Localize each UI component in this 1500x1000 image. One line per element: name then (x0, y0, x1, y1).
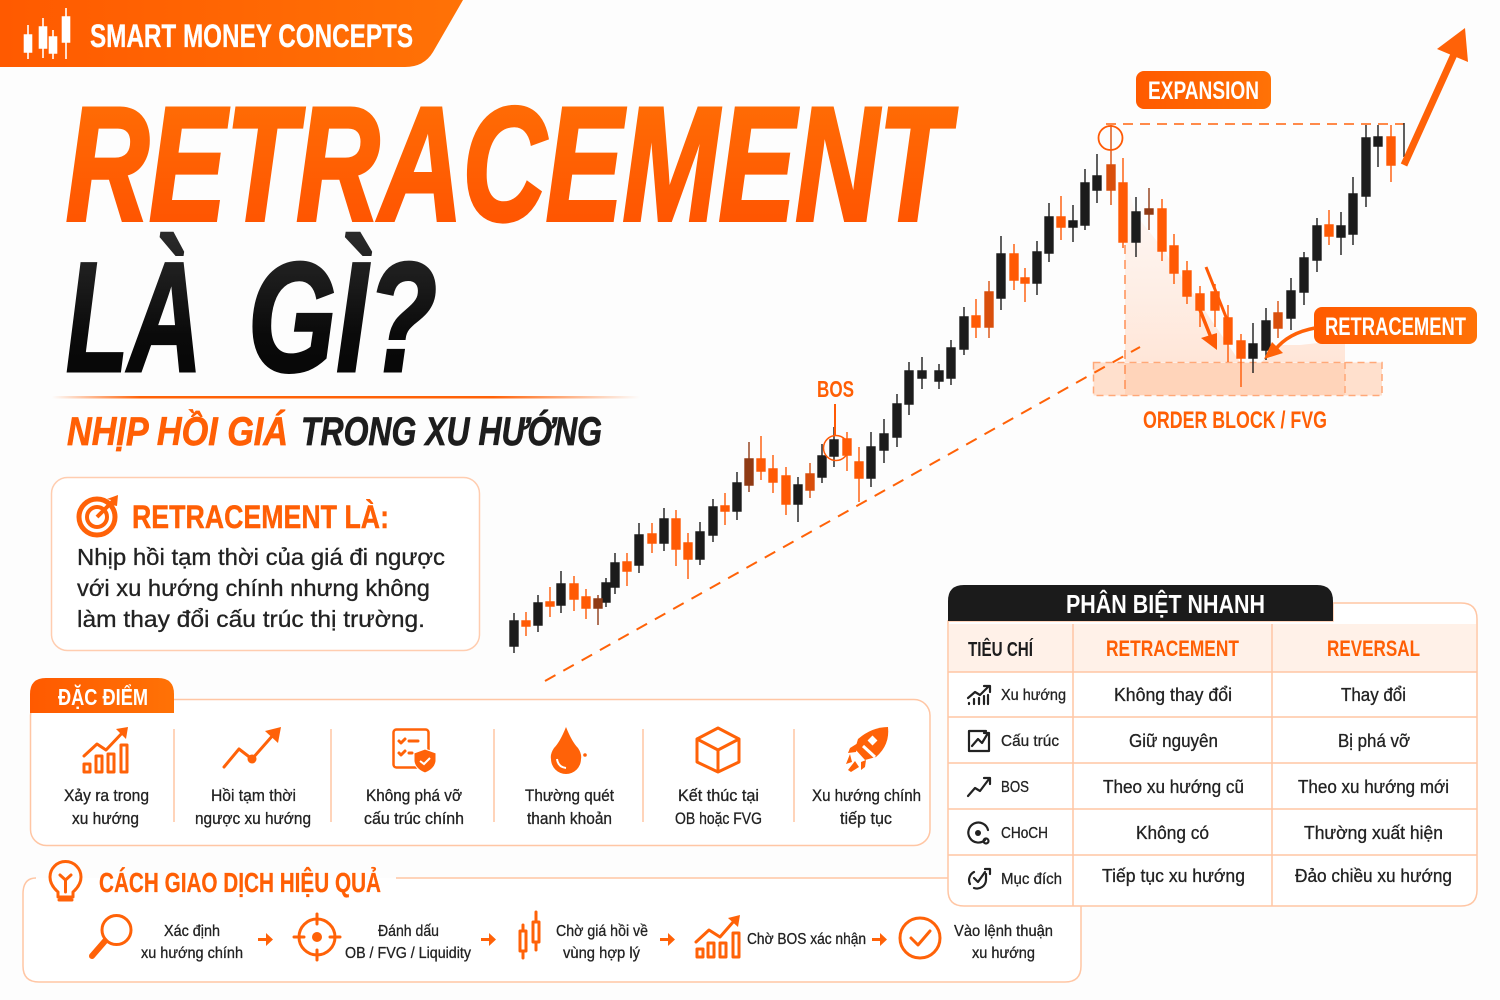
row: BOS (968, 777, 1449, 797)
step text: vùng hợp lý (563, 945, 640, 962)
banner title: SMART MONEY CONCEPTS (90, 18, 413, 54)
step text: OB / FVG / Liquidity (345, 945, 471, 962)
feature text: xu hướng (72, 809, 139, 828)
table title tab: PHÂN BIỆT NHANH (1066, 589, 1265, 619)
feature text (675, 786, 762, 828)
dark candles (510, 123, 1404, 653)
definition text: làm thay đổi cấu trúc thị trường. (77, 606, 425, 632)
row: CHoCH: CHoCH (1001, 825, 1048, 842)
top banner (0, 0, 463, 67)
row: purpose: Mục đích (1001, 871, 1062, 888)
arrow (481, 933, 496, 946)
row: purpose: Đảo chiều xu hướng (1295, 866, 1452, 886)
order block zone (1094, 362, 1382, 396)
BOS marker: BOS (817, 376, 854, 402)
icon: target (79, 495, 118, 535)
row: structure (969, 731, 1410, 751)
peak circle (1098, 126, 1122, 150)
step text: xu hướng chính (141, 945, 243, 962)
subtitle: TRONG XU HƯỚNG (301, 408, 602, 454)
feature text: Thường quét (525, 786, 614, 805)
feature text (195, 786, 311, 828)
trend line (545, 347, 1140, 681)
table title tab (948, 585, 1333, 621)
definition text (77, 544, 445, 632)
candlestick chart (510, 28, 1477, 681)
icon: check circle (900, 918, 940, 958)
step text: Đánh dấu (378, 923, 439, 940)
row: BOS: Theo xu hướng cũ (1103, 777, 1244, 797)
icon: chart (696, 915, 740, 957)
table header band (949, 624, 1476, 672)
step text: Chờ BOS xác nhận (747, 931, 866, 948)
step text (556, 923, 648, 962)
column headers: TIÊU CHÍ (968, 637, 1033, 661)
feature text (364, 786, 464, 828)
title: RETRACEMENT: RETRACEMENT (66, 74, 958, 255)
title: LÀ GÌ? (66, 231, 437, 405)
row: purpose: Tiếp tục xu hướng (1102, 866, 1245, 886)
icon: candles (520, 912, 539, 958)
row: CHoCH (968, 823, 1443, 844)
column headers: REVERSAL (1327, 636, 1420, 661)
arrow (660, 933, 675, 946)
step text: Chờ giá hồi về (556, 923, 648, 940)
feature text: tiếp tục (840, 809, 892, 828)
row: CHoCH: Không có (1136, 823, 1209, 843)
BOS marker (817, 376, 854, 460)
icon: crosshair (294, 914, 340, 960)
step text: Xác định (164, 923, 220, 940)
arrow (258, 933, 273, 946)
icon: rocket (846, 727, 888, 772)
feature text: ngược xu hướng (195, 809, 311, 828)
retracement shaded area (1125, 178, 1345, 362)
icon: checklist shield (394, 730, 436, 773)
subtitle: NHỊP HỒI GIÁ (67, 408, 288, 454)
order block label: ORDER BLOCK / FVG (1143, 407, 1327, 434)
expansion label: EXPANSION (1148, 77, 1259, 105)
feature text (64, 786, 149, 828)
panel: comparison table (948, 585, 1477, 906)
icon: candlesticks (24, 8, 70, 59)
row: CHoCH: Thường xuất hiện (1304, 823, 1443, 843)
arrow (872, 933, 887, 946)
feature text: OB hoặc FVG (675, 809, 762, 828)
arrow: pullback (1200, 267, 1228, 350)
icon: liquidity drop (551, 727, 587, 774)
feature text: Kết thúc tại (678, 786, 759, 805)
feature text (525, 786, 614, 828)
row: structure: Giữ nguyên (1129, 731, 1218, 751)
row: trend: Xu hướng (1001, 687, 1066, 704)
icon: zigzag arrow (224, 727, 281, 767)
icon: cube (697, 728, 739, 772)
row: BOS: Theo xu hướng mới (1298, 777, 1449, 797)
step text: xu hướng (972, 945, 1035, 962)
title: LÀ GÌ?: GÌ? (248, 231, 437, 405)
row: BOS: BOS (1001, 779, 1029, 796)
orange candles (522, 125, 1395, 636)
section heading: CÁCH GIAO DỊCH HIỆU QUẢ (99, 866, 381, 898)
panel: definition (52, 478, 480, 650)
mixed candles (594, 188, 1153, 625)
row: trend (968, 685, 1406, 705)
definition heading: RETRACEMENT LÀ: (132, 499, 389, 535)
column headers: RETRACEMENT (1106, 636, 1239, 661)
panel: how to trade (23, 861, 1081, 982)
feature text: Xu hướng chính (812, 786, 921, 805)
row: structure: Bị phá vỡ (1338, 731, 1410, 751)
row: structure: Cấu trúc (1001, 733, 1059, 750)
retracement label (1264, 307, 1477, 359)
definition text: Nhịp hồi tạm thời của giá đi ngược (77, 544, 445, 570)
column headers (968, 636, 1420, 661)
arrow: expansion up (1404, 28, 1468, 165)
row: trend: Không thay đổi (1114, 685, 1232, 705)
title: LÀ GÌ?: LÀ (66, 231, 202, 405)
feature text (812, 786, 921, 828)
tab heading (30, 678, 174, 713)
row: trend: Thay đổi (1341, 685, 1406, 705)
step text: Vào lệnh thuận (954, 923, 1053, 940)
step text (345, 923, 471, 962)
step text (141, 923, 243, 962)
feature text: Hồi tạm thời (211, 786, 296, 805)
definition text: với xu hướng chính nhưng không (77, 575, 430, 601)
icon: light bulb (50, 861, 81, 900)
panel: characteristics (30, 678, 930, 846)
subtitle (67, 408, 602, 454)
row: purpose (969, 866, 1452, 889)
icon: rising chart (84, 727, 128, 772)
feature text: Không phá vỡ (366, 786, 462, 805)
feature text: Xảy ra trong (64, 786, 149, 805)
step text (954, 923, 1053, 962)
feature text: thanh khoản (527, 809, 612, 828)
icon: magnifier (92, 916, 131, 956)
expansion label (1136, 71, 1271, 109)
feature text: cấu trúc chính (364, 809, 464, 828)
tab heading: ĐẶC ĐIỂM (58, 683, 148, 710)
